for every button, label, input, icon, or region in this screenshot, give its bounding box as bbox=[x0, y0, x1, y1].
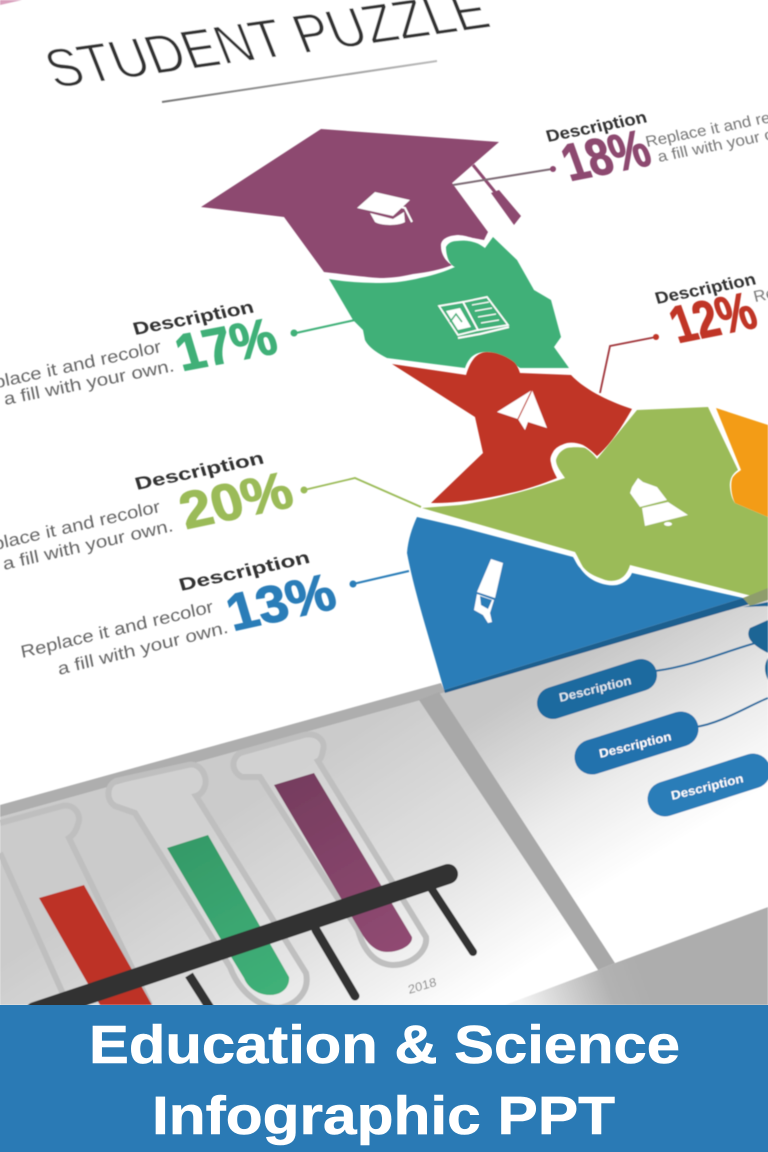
panel: puzzle bbox=[201, 129, 768, 693]
puzzle gap shadow bbox=[743, 588, 768, 606]
banner heading line 1: Education & Science bbox=[89, 1015, 680, 1075]
connector 17% bbox=[290, 320, 355, 336]
puzzle piece: green book bbox=[329, 237, 569, 368]
label 18% bbox=[544, 102, 768, 193]
bottom right shadow area bbox=[505, 907, 768, 1005]
panel: description pills bbox=[553, 602, 768, 803]
banner heading line 2: Infographic PPT bbox=[152, 1086, 615, 1146]
icon: paper plane bbox=[497, 390, 547, 430]
axis year: 2018 bbox=[407, 975, 438, 997]
label 20% bbox=[0, 448, 299, 574]
lower left slide bbox=[0, 700, 598, 1005]
test tube 1 bbox=[0, 806, 150, 1005]
connector lines bbox=[655, 640, 768, 766]
puzzle piece: orange bbox=[716, 408, 768, 517]
label 13%: Description bbox=[176, 547, 312, 595]
slide divider band bbox=[419, 692, 615, 970]
label 20%: Description bbox=[132, 448, 266, 494]
label 13% bbox=[19, 547, 342, 679]
cap tassel bbox=[473, 165, 521, 225]
pill 3: Description bbox=[670, 771, 745, 803]
label 20%: 20% bbox=[172, 460, 299, 540]
hub shapes bbox=[743, 602, 768, 680]
connector 20% bbox=[300, 478, 421, 507]
liquid: purple bar bbox=[274, 773, 412, 952]
label 13%: 13% bbox=[219, 562, 342, 642]
icon: pen bbox=[474, 559, 503, 623]
blue piece dark edge bbox=[444, 598, 750, 693]
rack bar bbox=[35, 874, 448, 1012]
label 18%: 18% bbox=[554, 120, 658, 193]
pill 1: Description bbox=[558, 673, 633, 705]
liquid: red bar bbox=[39, 885, 152, 1005]
liquid: green bar bbox=[167, 835, 289, 995]
top-left pink sliver bbox=[0, 0, 22, 5]
label 13%: Replace it and recolor bbox=[19, 596, 215, 662]
label 20%: a fill with your own. bbox=[1, 515, 175, 574]
label 13%: a fill with your own. bbox=[56, 617, 230, 679]
connector 18% bbox=[453, 166, 556, 185]
chart: test tubes bbox=[0, 734, 473, 1012]
slide top edge band bbox=[0, 683, 445, 817]
label 18%: Description bbox=[544, 108, 649, 146]
label 12%: Description bbox=[653, 270, 758, 308]
test tube 3 bbox=[233, 734, 426, 965]
title underline bbox=[162, 61, 437, 102]
connector 12% bbox=[600, 334, 659, 393]
puzzle piece: lime bell bbox=[422, 407, 768, 596]
label 17% bbox=[0, 297, 283, 409]
lower right slide bbox=[439, 590, 768, 963]
label 17%: Description bbox=[130, 297, 256, 339]
label 17%: a fill with your own. bbox=[2, 355, 176, 409]
label 17%: 17% bbox=[168, 307, 283, 382]
rack leg bbox=[431, 888, 473, 952]
rack leg bbox=[316, 930, 355, 996]
rack leg bbox=[189, 975, 210, 1008]
icon: open book bbox=[439, 297, 509, 338]
puzzle piece: blue pen bbox=[407, 517, 743, 690]
icon: bell bbox=[630, 478, 688, 526]
pill 2: Description bbox=[598, 729, 673, 761]
test tube 2 bbox=[108, 765, 307, 1008]
connector 13% bbox=[350, 571, 409, 588]
banner bbox=[0, 1005, 768, 1152]
icon: graduation cap bbox=[357, 192, 412, 225]
puzzle piece: graduation cap bbox=[201, 129, 499, 278]
puzzle piece: red plane bbox=[392, 352, 632, 503]
